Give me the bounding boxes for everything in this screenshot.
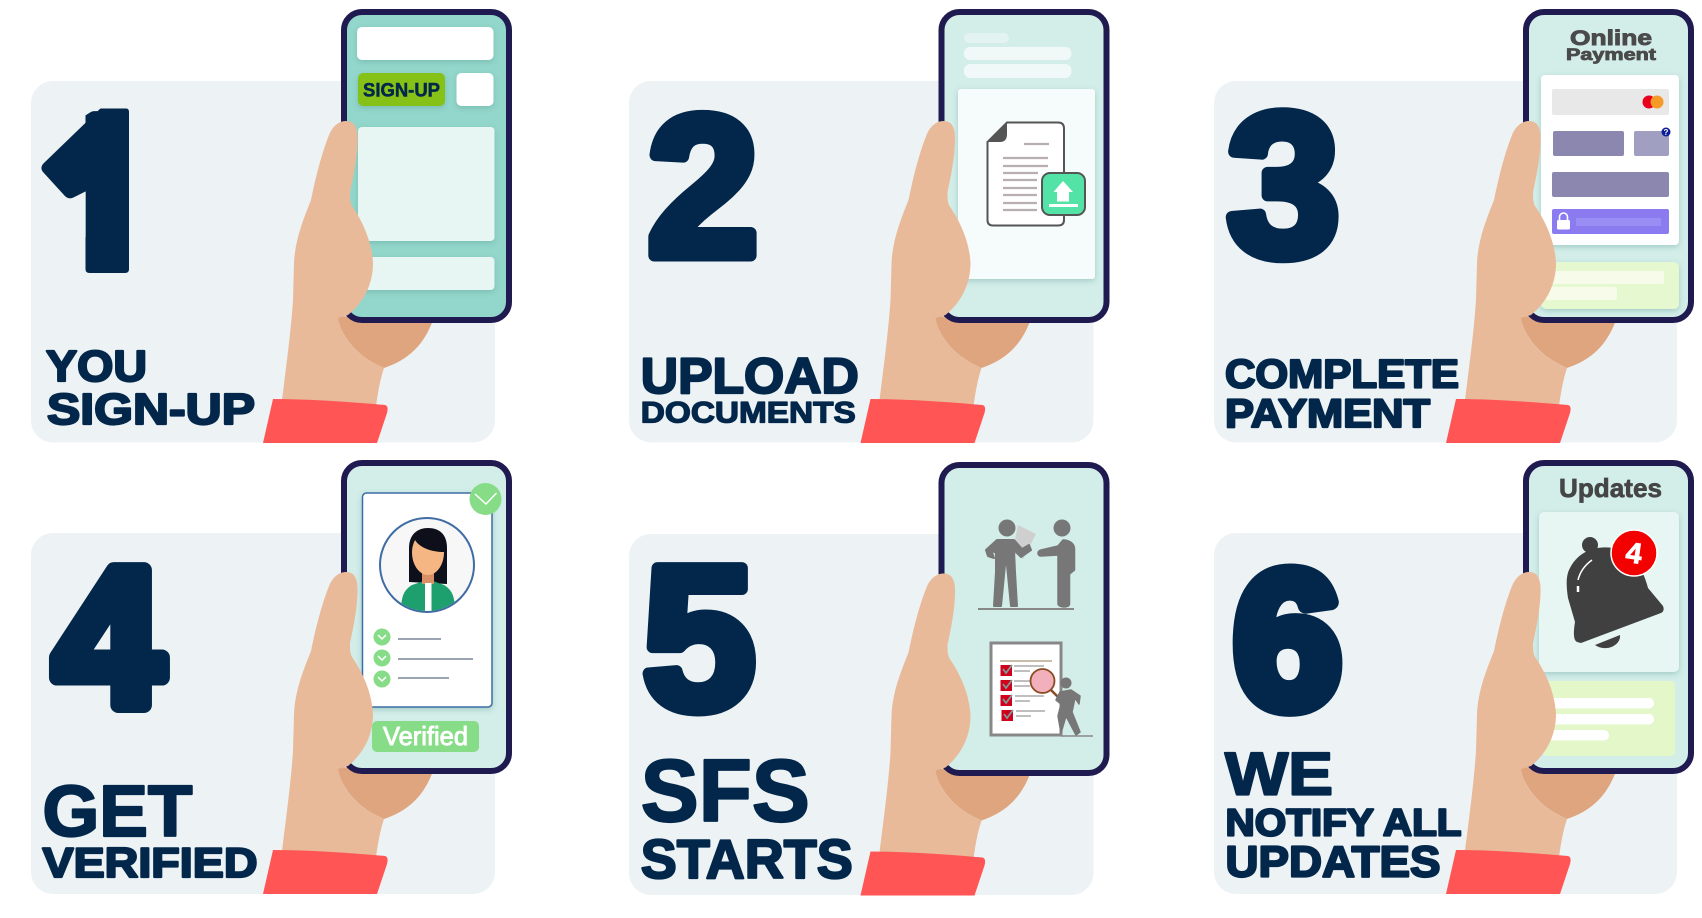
hand and sleeve (1446, 121, 1571, 443)
hand palm shadow (934, 768, 1030, 820)
card background 2 (629, 81, 1094, 442)
panel: step 4 get verified (31, 463, 509, 894)
screen title: Online (1570, 27, 1652, 50)
hand and sleeve (860, 121, 985, 443)
heading: you sign-up: SIGN-UP (47, 385, 255, 434)
heading: complete payment (1225, 352, 1459, 436)
icon: help (1662, 128, 1670, 137)
lower panel (358, 257, 494, 290)
phone: discussion and review screen (942, 465, 1106, 773)
heading: sfs starts: SFS (641, 741, 810, 840)
heading: complete payment: COMPLETE (1225, 352, 1459, 396)
panel: step 3 complete payment (1214, 12, 1691, 443)
panel: step 5 sfs starts (629, 465, 1106, 896)
number 1 (41, 108, 129, 273)
profile card (362, 493, 492, 707)
phone: payment screen (1526, 12, 1691, 320)
phone: sign-up screen (344, 12, 509, 320)
number 2: 2 (647, 76, 759, 298)
card background 3 (1214, 81, 1677, 442)
heading: we notify all updates (1225, 740, 1462, 886)
phone: upload screen (942, 12, 1106, 320)
panel: step 6 we notify all updates (1214, 463, 1691, 894)
input bar (357, 27, 494, 60)
heading: we notify all updates: UPDATES (1226, 838, 1440, 886)
bell panel (1539, 512, 1679, 672)
hand and sleeve (263, 572, 388, 894)
card background 6 (1214, 533, 1677, 894)
heading: upload documents: DOCUMENTS (641, 396, 856, 430)
number 5: 5 (642, 524, 756, 752)
pay button (1552, 209, 1669, 234)
number 6: 6 (1234, 532, 1341, 749)
notification badge: 4 (1624, 537, 1644, 571)
heading: upload documents: UPLOAD (641, 348, 859, 404)
heading: get verified (42, 772, 258, 886)
heading: sfs starts: STARTS (641, 828, 853, 890)
message panel (1543, 681, 1675, 756)
hand palm shadow (1520, 767, 1616, 819)
upload panel (958, 89, 1095, 279)
card background 5 (629, 534, 1094, 895)
notification badge (1611, 530, 1657, 576)
hand and sleeve (1446, 572, 1571, 894)
hand palm shadow (934, 316, 1030, 368)
card background 4 (31, 533, 495, 894)
screen title (1566, 27, 1657, 64)
number 4: 4 (54, 528, 163, 747)
panel: step 1 you sign-up (31, 12, 509, 443)
icon: upload badge (1042, 173, 1085, 215)
content panel (358, 127, 494, 241)
phone: verified screen (344, 463, 509, 771)
heading: you sign-up: YOU (46, 342, 147, 391)
icon: help: ? (1664, 128, 1669, 137)
icon: two people with document (978, 520, 1074, 609)
phone: updates screen (1526, 463, 1691, 771)
hand palm shadow (337, 316, 433, 368)
sign-up button: SIGN-UP (363, 80, 440, 102)
small white box (456, 73, 494, 106)
icon: document (988, 122, 1064, 226)
panel: step 2 upload documents (629, 12, 1106, 443)
heading: we notify all updates: NOTIFY ALL (1226, 802, 1462, 844)
number 3: 3 (1227, 72, 1340, 299)
check list (374, 628, 473, 688)
hand and sleeve (860, 574, 985, 896)
screen title: Updates (1559, 473, 1662, 503)
header bars (964, 33, 1071, 78)
heading: we notify all updates: WE (1225, 740, 1333, 808)
card background 1 (31, 81, 495, 442)
hand and sleeve (263, 121, 388, 443)
payment form (1541, 75, 1679, 245)
hand palm shadow (1520, 316, 1616, 368)
heading: complete payment: PAYMENT (1225, 392, 1430, 436)
sign-up button (358, 73, 445, 106)
heading: you sign-up (46, 342, 255, 434)
avatar (380, 518, 474, 612)
hand palm shadow (337, 767, 433, 819)
verified tick badge (470, 483, 502, 515)
screen title: Payment (1566, 46, 1657, 64)
number 1: 1 (42, 71, 162, 312)
icon: bell (1567, 537, 1664, 648)
heading: sfs starts (641, 741, 853, 890)
heading: get verified: GET (42, 772, 193, 852)
verified label: Verified (383, 721, 468, 751)
heading: get verified: VERIFIED (42, 839, 258, 886)
confirmation panel (1541, 262, 1679, 309)
icon: card logo (1642, 96, 1664, 108)
icon: checklist with magnifier (991, 643, 1093, 736)
heading: upload documents (641, 348, 859, 430)
